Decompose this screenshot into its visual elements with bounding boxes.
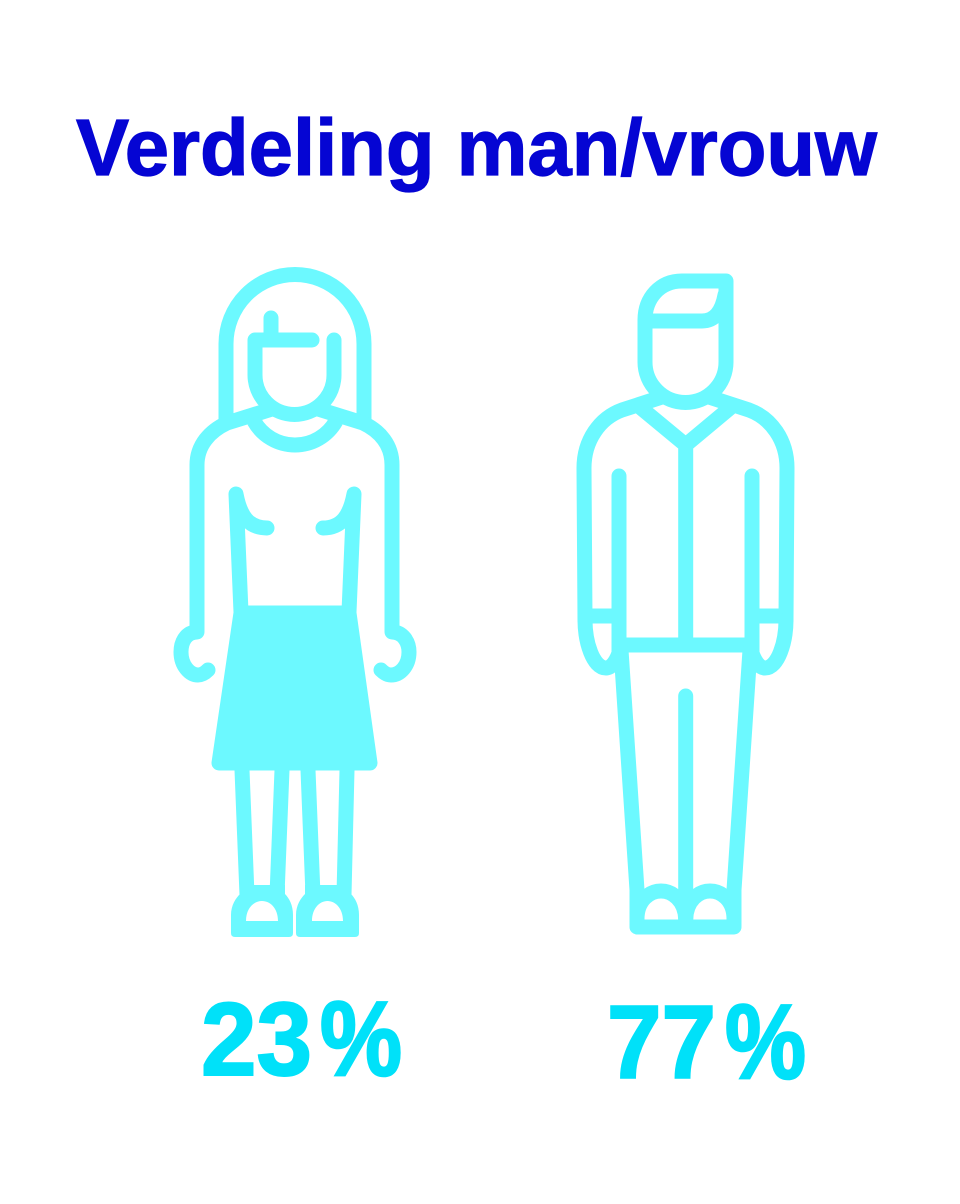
legs <box>242 770 347 895</box>
title: Verdeling man/vrouw <box>76 103 878 192</box>
collar <box>254 421 336 445</box>
stat: men 77% <box>607 983 806 1101</box>
belt <box>619 638 752 652</box>
collar and placket <box>641 408 730 645</box>
shoes <box>637 891 734 927</box>
shoes <box>231 885 359 937</box>
hands <box>181 632 409 675</box>
trousers <box>621 650 750 925</box>
sleeves inner lines <box>619 476 752 655</box>
icon: man <box>584 281 787 927</box>
stat: women 23%: 23 <box>201 982 312 1098</box>
stat: men 77%: % <box>725 983 806 1101</box>
icon: woman <box>181 274 409 937</box>
cuffs <box>585 608 786 624</box>
head and hair <box>645 281 726 402</box>
stat: women 23%: % <box>320 980 402 1098</box>
shoulders and arms <box>197 409 392 630</box>
skirt <box>219 613 370 763</box>
hair <box>226 274 364 420</box>
torso lines <box>236 494 354 612</box>
shoulders and arms <box>584 397 787 620</box>
stat: men 77%: 77 <box>607 985 716 1101</box>
face <box>255 318 334 414</box>
stat: women 23% <box>201 980 402 1098</box>
